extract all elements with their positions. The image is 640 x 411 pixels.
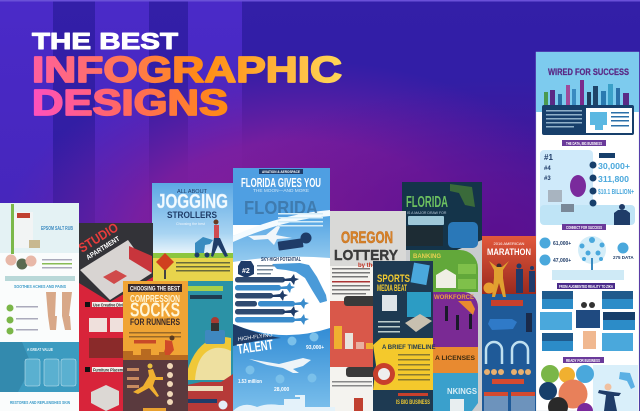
ingredient circles (6, 254, 16, 266)
heading line: THE BEST: THE BEST (32, 28, 179, 54)
blue panel (410, 373, 478, 411)
panel: oregon lottery: LOTTERY (334, 247, 398, 264)
skyline band (123, 349, 188, 360)
heading: sports media beat: SPORTS (377, 273, 410, 285)
panel: oregon lottery (330, 211, 406, 411)
panel: studio apartment (76, 220, 153, 411)
banner: ready for business: READY FOR BUSINESS (566, 358, 600, 363)
panel: florida gives you: 1.53 million (238, 379, 263, 385)
banner: augmented reality: FROM AUGMENTED REALITY TO ZIKA (559, 284, 614, 289)
heading: florida: FLORIDA (406, 194, 448, 211)
panel: sports media beat: MEDIA BEAT (377, 283, 407, 293)
heading: talent: TALENT (236, 336, 274, 357)
runners (484, 261, 535, 297)
stats (246, 366, 254, 374)
legs photo (46, 292, 57, 330)
network tree: 61,000+ (553, 241, 571, 247)
banner: big data: THE DATA, BIG BUSINESS (566, 141, 602, 146)
network tree (540, 236, 634, 280)
blue section: A GREAT VALUE (27, 347, 53, 352)
panel: studio apartment: APARTMENT (85, 235, 122, 262)
wave: talent section (233, 324, 330, 411)
green panel (410, 250, 478, 292)
stat tiles (540, 291, 635, 351)
network tree: 47,000+ (553, 258, 571, 264)
heading: choosing (128, 284, 182, 292)
panel: stats: #3 (544, 176, 551, 182)
intro band (542, 105, 634, 135)
purple panel (410, 292, 478, 347)
banner: big data (562, 140, 606, 146)
image strip (5, 276, 75, 281)
panel: stats (540, 150, 635, 225)
map of florida (272, 263, 327, 303)
skyline (544, 80, 629, 105)
panel: oregon lottery: by the Numbers (358, 263, 404, 269)
warning sign (156, 253, 174, 271)
panel: marathon (482, 236, 536, 411)
blue section (0, 342, 79, 392)
plane bars (235, 274, 309, 325)
orange panel: A LICENSES (435, 356, 475, 362)
panel: stats: #4 (544, 166, 551, 172)
blue panel: NKINGS (447, 387, 478, 396)
banner: augmented reality (557, 283, 615, 289)
isometric room (80, 240, 152, 300)
big word: florida: FLORIDA (244, 198, 318, 218)
heading: restores: RESTORES AND REPLENISHES SKIN (10, 400, 70, 405)
section: use creative dividers (85, 302, 90, 307)
heading: epsom salt rub: EPSOM SALT RUB (41, 226, 73, 232)
runner and stroller (194, 220, 228, 258)
banner: connect for success (562, 224, 606, 230)
grass (152, 253, 233, 258)
banner: connect for success: CONNECT FOR SUCCESS (566, 225, 602, 230)
heading line: DESIGNS: DESIGNS (32, 82, 228, 123)
title (32, 28, 342, 123)
panel: florida gives you: 93,000+ (306, 345, 324, 351)
heading: oregon lottery: OREGON (341, 228, 393, 247)
arches (486, 342, 528, 364)
panel: florida gives you: AVIATION & AEROSPACE (262, 170, 301, 174)
panel label: map (488, 300, 532, 332)
heading: strollers: STROLLERS (167, 210, 217, 220)
tables (484, 379, 535, 411)
panel: florida gives you: 28,000 (274, 387, 290, 393)
panel: stats: 30,000+ (598, 161, 630, 171)
subheading: sky-high potential: SKY-HIGH POTENTIAL (261, 257, 301, 263)
orange panel (433, 347, 478, 373)
icon bullets (6, 304, 14, 312)
panel: jogging strollers: Choosing the best (176, 222, 205, 226)
panel: sports media beat: IS BIG BUSINESS (396, 400, 430, 406)
panel: florida gives you (233, 168, 335, 411)
banner: ready for business (563, 357, 604, 363)
lower runner (133, 369, 163, 397)
green panel: BANKING (413, 254, 441, 260)
panel: studio apartment: Use Creative Divi (93, 302, 123, 308)
airplane (248, 226, 292, 245)
purple panel: WORKFORCE (434, 295, 474, 301)
heading: for runners: FOR RUNNERS (130, 317, 180, 327)
yellow timeline: A BRIEF TIMELINE (382, 345, 435, 351)
heading: all about: ALL ABOUT (177, 189, 208, 195)
circles and businesswoman (539, 365, 638, 411)
circles row (484, 369, 531, 375)
panel: compression socks (123, 281, 188, 411)
heading: jogging: JOGGING (157, 191, 228, 213)
heading line: INFOGRAPHIC: INFOGRAPHIC (32, 49, 342, 90)
panel: stats: 311,800 (598, 174, 629, 184)
clouds and tower (233, 395, 335, 411)
panel: sports media beat (373, 261, 435, 411)
panel: studio apartment: Furniture Placem (93, 368, 123, 372)
panel: florida gives you: HIGH-FLYING (237, 332, 273, 343)
heading: studio apartment: STUDIO (76, 220, 121, 256)
panel: florida financial: IS A MAJOR DRAW FOR (407, 211, 447, 215)
badge: number two (238, 261, 254, 278)
heading: socks: SOCKS (130, 300, 180, 322)
network tree: 275 DATA (613, 255, 634, 260)
panel: marathon: 2016 AMERICAN (494, 241, 525, 246)
benefit icons (167, 363, 173, 405)
panel: stats: #1 (544, 153, 553, 162)
runner (163, 340, 174, 357)
heading: compression: COMPRESSION (130, 294, 180, 305)
heading: florida gives you: FLORIDA GIVES YOU (241, 176, 321, 190)
panel: jogging strollers (152, 183, 233, 411)
panel: compression socks: CHOOSING THE BEST (130, 286, 180, 292)
red chart band (330, 296, 384, 367)
panel: epsom salt (0, 203, 79, 411)
heading: marathon: MARATHON (487, 247, 531, 258)
teal section (187, 281, 233, 411)
yellow timeline (373, 338, 435, 390)
airplane large (249, 358, 311, 373)
panel: florida financial (402, 182, 482, 411)
panel: florida gives you: THE MOON—AND MORE (253, 188, 309, 193)
panel: wired for success (536, 52, 639, 411)
sky photo (233, 210, 330, 268)
heading: soothes aches: SOOTHES ACHES AND PAINS (14, 284, 66, 289)
product tube (11, 204, 40, 254)
panel: florida gives you: #2 (242, 268, 250, 275)
